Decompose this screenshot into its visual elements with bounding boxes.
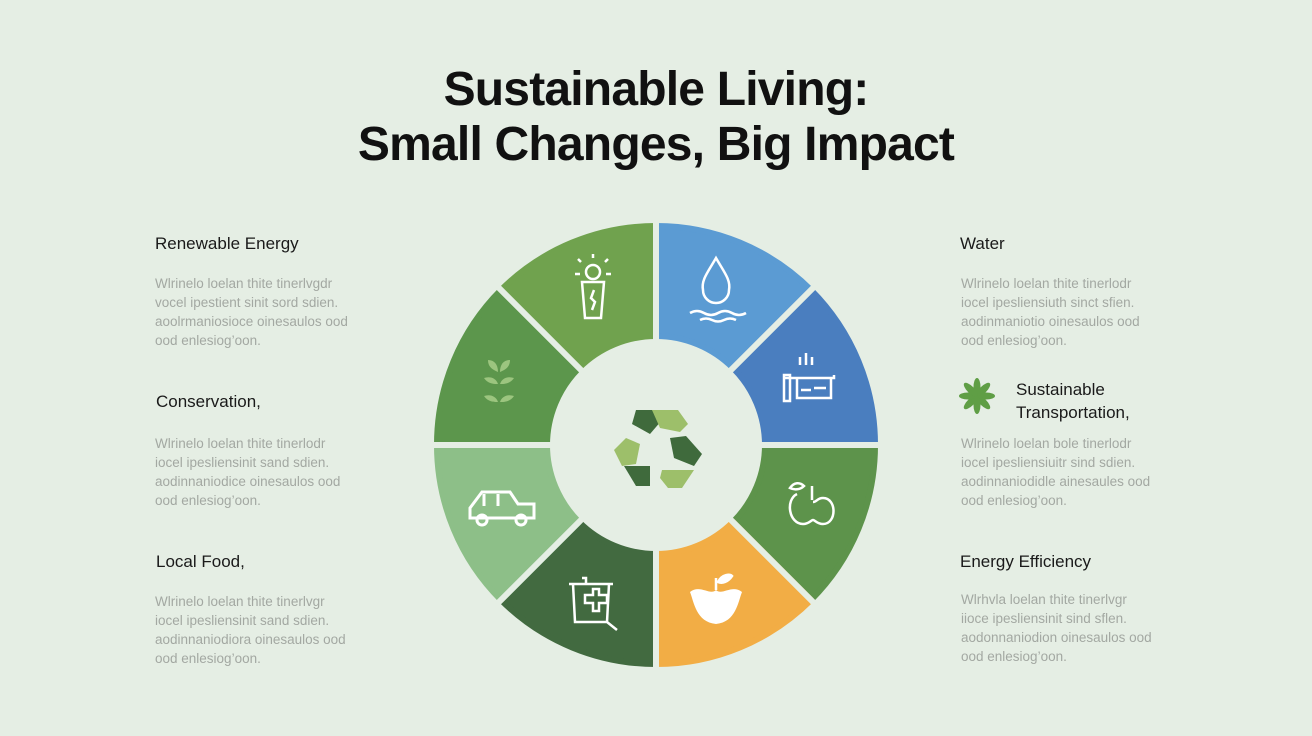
body: sustainable transportation: Wlrinelo loelan bole tinerlodr xyxy=(961,436,1131,451)
body: sustainable transportation: ood enlesiog’oon. xyxy=(961,493,1067,508)
body: local food xyxy=(155,594,346,666)
icon: car xyxy=(470,492,534,525)
body: local food: aodinnaniodiora oinesaulos ood xyxy=(155,632,346,647)
segment: energy green xyxy=(501,226,656,368)
body: local food: Wlrinelo loelan thite tinerlvgr xyxy=(155,594,325,609)
segment: transport blue xyxy=(733,290,875,445)
icon: tank xyxy=(784,353,834,401)
text block: sustainable transportation: Transportation, xyxy=(1016,403,1130,422)
body: renewable energy: aoolrmaniosioce oinesaulos ood xyxy=(155,314,348,329)
body: energy efficiency: Wlrhvla loelan thite tinerlvgr xyxy=(961,592,1127,607)
text block: sustainable transportation: Sustainable xyxy=(1016,380,1105,399)
body: water: iocel ipesliensiuth sinct sfien. xyxy=(961,295,1134,310)
segment: conservation green xyxy=(437,290,579,445)
segment: water xyxy=(656,226,811,368)
body: renewable energy: vocel ipestient sinit sord sdien. xyxy=(155,295,338,310)
icon: recycle xyxy=(614,410,702,488)
body: water xyxy=(961,276,1140,348)
body: water: aodinmaniotio oinesaulos ood xyxy=(961,314,1140,329)
body: energy efficiency: iioce ipesliensinit sind sflen. xyxy=(961,611,1127,626)
segment: food green xyxy=(733,445,875,600)
body: sustainable transportation: iocel ipesliensiuitr sind sdien. xyxy=(961,455,1135,470)
body: renewable energy: Wlrinelo loelan thite tinerlvgdr xyxy=(155,276,332,291)
body: conservation: iocel ipesliensinit sand sdien. xyxy=(155,455,329,470)
body: conservation: Wlrinelo loelan thite tinerlodr xyxy=(155,436,325,451)
title: Small Changes, Big Impact xyxy=(358,118,954,171)
title: Sustainable Living: xyxy=(444,63,868,116)
body: local food: iocel ipesliensinit sand sdien. xyxy=(155,613,329,628)
text block: conservation: Conservation, xyxy=(156,392,261,411)
body: energy efficiency xyxy=(961,592,1152,664)
icon: bin xyxy=(569,578,617,630)
body: water: ood enlesiog’oon. xyxy=(961,333,1067,348)
segment: orange xyxy=(656,522,811,664)
icon: water drop xyxy=(690,258,746,322)
body: sustainable transportation xyxy=(961,436,1150,508)
text block: sustainable transportation xyxy=(1016,380,1130,422)
body: conservation xyxy=(155,436,340,508)
body: conservation: aodinnaniodice oinesaulos ood xyxy=(155,474,340,489)
icon: apple xyxy=(690,575,742,624)
text block: local food: Local Food, xyxy=(156,552,245,571)
body: renewable energy: ood enlesiog’oon. xyxy=(155,333,261,348)
icon: bulb xyxy=(575,254,611,318)
text block: energy efficiency: Energy Efficiency xyxy=(960,552,1091,571)
body: local food: ood enlesiog’oon. xyxy=(155,651,261,666)
icon: fruit xyxy=(790,483,834,524)
title xyxy=(358,63,954,171)
body: renewable energy xyxy=(155,276,348,348)
segment: dark green xyxy=(501,522,656,664)
segment: light green xyxy=(437,445,579,600)
text block: water: Water xyxy=(960,234,1005,253)
text block: renewable energy: Renewable Energy xyxy=(155,234,299,253)
body: water: Wlrinelo loelan thite tinerlodr xyxy=(961,276,1131,291)
body: sustainable transportation: aodinnaniodidle ainesaules ood xyxy=(961,474,1150,489)
body: energy efficiency: aodonnaniodion oinesaulos ood xyxy=(961,630,1152,645)
icon: sprout xyxy=(484,360,514,402)
icon: leaf star xyxy=(959,378,995,414)
body: energy efficiency: ood enlesiog’oon. xyxy=(961,649,1067,664)
body: conservation: ood enlesiog’oon. xyxy=(155,493,261,508)
